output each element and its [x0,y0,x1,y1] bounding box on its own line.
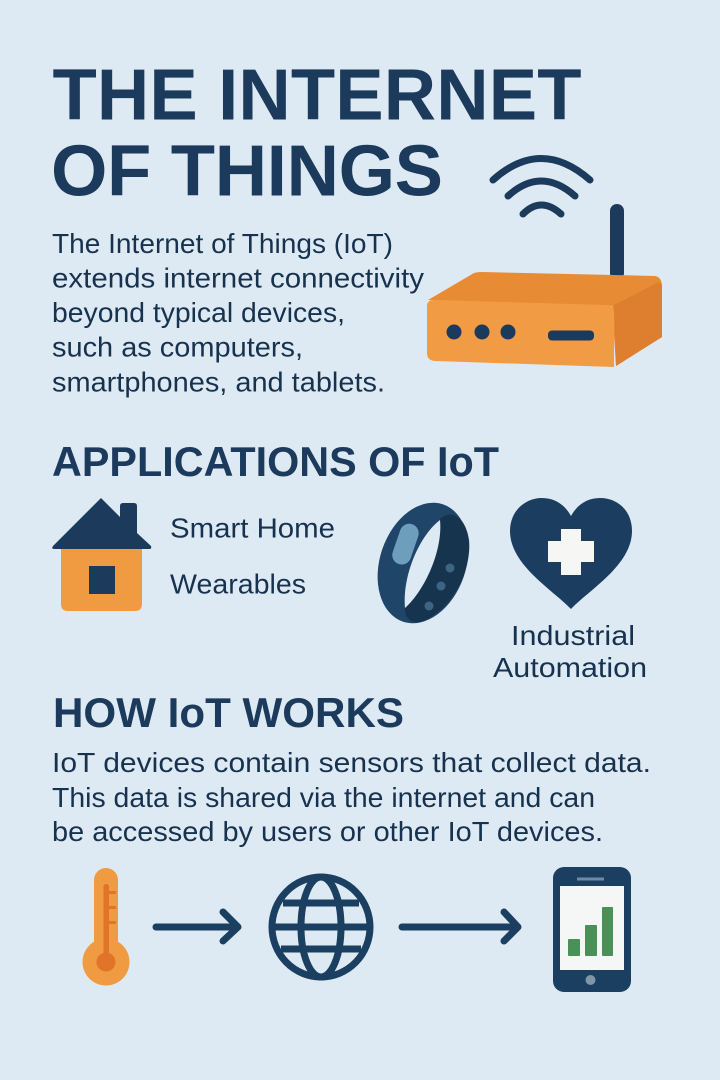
intro text block: smartphones, and tablets. [52,366,385,398]
title: THE INTERNET [52,54,582,136]
icon: globe [272,877,370,977]
arrow: internet to phone [402,912,518,941]
icon: smartphone with chart [553,867,631,992]
heading: applications: APPLICATIONS OF IoT [52,438,499,485]
heading: how IoT works: HOW IoT WORKS [53,689,404,736]
how it works text block: be accessed by users or other IoT devices. [52,816,603,847]
how it works text block [52,747,651,847]
title [51,54,582,212]
intro text block [52,228,424,398]
label: smart home: Smart Home [170,512,335,544]
intro text block: extends internet connectivity [52,262,424,294]
icon: heart with cross [510,498,632,609]
arrow: sensor to internet [156,912,238,941]
label: industrial automation: Automation [493,652,647,683]
label: industrial automation: Industrial [511,620,635,651]
intro text block: beyond typical devices, [52,297,345,328]
how it works text block: IoT devices contain sensors that collect data. [52,747,651,778]
intro text block: The Internet of Things (IoT) [52,228,393,259]
icon: thermometer [82,868,130,986]
icon: smart home [52,498,151,611]
bar chart [568,907,613,956]
icon: wearable band [362,490,484,636]
intro text block: such as computers, [52,332,303,362]
how it works text block: This data is shared via the internet and can [52,782,595,813]
icon: wifi signal [493,158,590,214]
title: OF THINGS [51,130,443,212]
label: industrial automation [493,620,647,683]
label: wearables: Wearables [170,568,306,600]
icon: router [427,204,662,367]
